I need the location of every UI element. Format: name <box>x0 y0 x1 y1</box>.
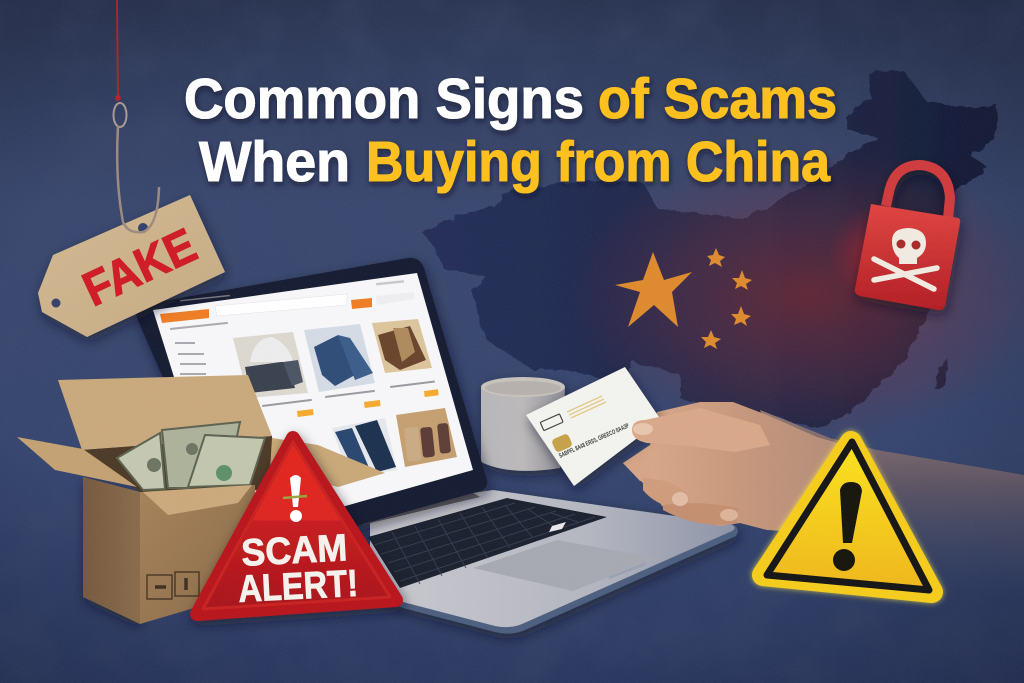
handling marks <box>147 572 199 599</box>
webpage content <box>160 280 457 478</box>
skull and crossbones <box>874 228 937 289</box>
screen display <box>153 273 473 540</box>
product photo 2 <box>304 324 375 392</box>
thumb over card <box>632 408 770 452</box>
hand <box>623 402 860 532</box>
trackpad <box>473 540 657 591</box>
map of China <box>422 70 998 427</box>
coffee cup <box>481 377 565 471</box>
hook point <box>123 187 159 232</box>
box front <box>140 485 255 624</box>
title: When <box>199 130 350 194</box>
product photo 1 <box>233 332 308 398</box>
card gold lines <box>567 396 606 418</box>
left flap <box>17 437 137 487</box>
right flap <box>270 438 385 487</box>
scam alert triangle <box>197 438 396 614</box>
card chip <box>551 433 573 453</box>
title: Common Signs <box>184 67 584 131</box>
title: of Scams <box>598 67 837 131</box>
title <box>184 67 837 194</box>
laptop <box>136 258 738 634</box>
keyboard keys <box>374 503 595 584</box>
price rows <box>262 381 439 417</box>
fake price tag <box>38 195 225 337</box>
laptop base <box>370 490 738 634</box>
lock glow <box>828 205 928 305</box>
dollar bills <box>117 422 265 490</box>
title: Buying from China <box>366 130 831 194</box>
map red glow <box>570 145 1024 445</box>
exclamation mark <box>840 482 862 543</box>
product photo 3 <box>372 319 432 373</box>
sidebar list <box>170 322 228 375</box>
card logo <box>540 414 563 431</box>
scam alert label: SCAM <box>240 527 348 575</box>
stars of the flag <box>615 248 752 349</box>
fishing line and hook <box>114 0 126 222</box>
exclamation mark <box>290 475 301 507</box>
hinge band <box>355 491 480 525</box>
back flap <box>58 375 272 450</box>
red padlock with skull <box>855 165 960 310</box>
yellow warning triangle <box>763 442 932 592</box>
white key <box>549 522 566 532</box>
arm <box>760 410 1024 600</box>
scam alert label <box>235 527 359 611</box>
card number: SABPFL 8A48 ERSS, GREECO 8AA3P <box>558 422 631 460</box>
product photo 6 <box>396 408 457 467</box>
product photo 5 <box>332 418 397 478</box>
fake label: FAKE <box>75 219 205 317</box>
keyboard <box>368 498 607 588</box>
screen bezel <box>136 258 487 562</box>
scam alert label: ALERT! <box>237 563 359 611</box>
front flap <box>143 485 252 515</box>
box interior <box>82 436 275 492</box>
box side <box>83 477 140 624</box>
cardboard box with money <box>17 375 385 624</box>
header row <box>160 280 415 323</box>
credit card <box>526 367 661 486</box>
